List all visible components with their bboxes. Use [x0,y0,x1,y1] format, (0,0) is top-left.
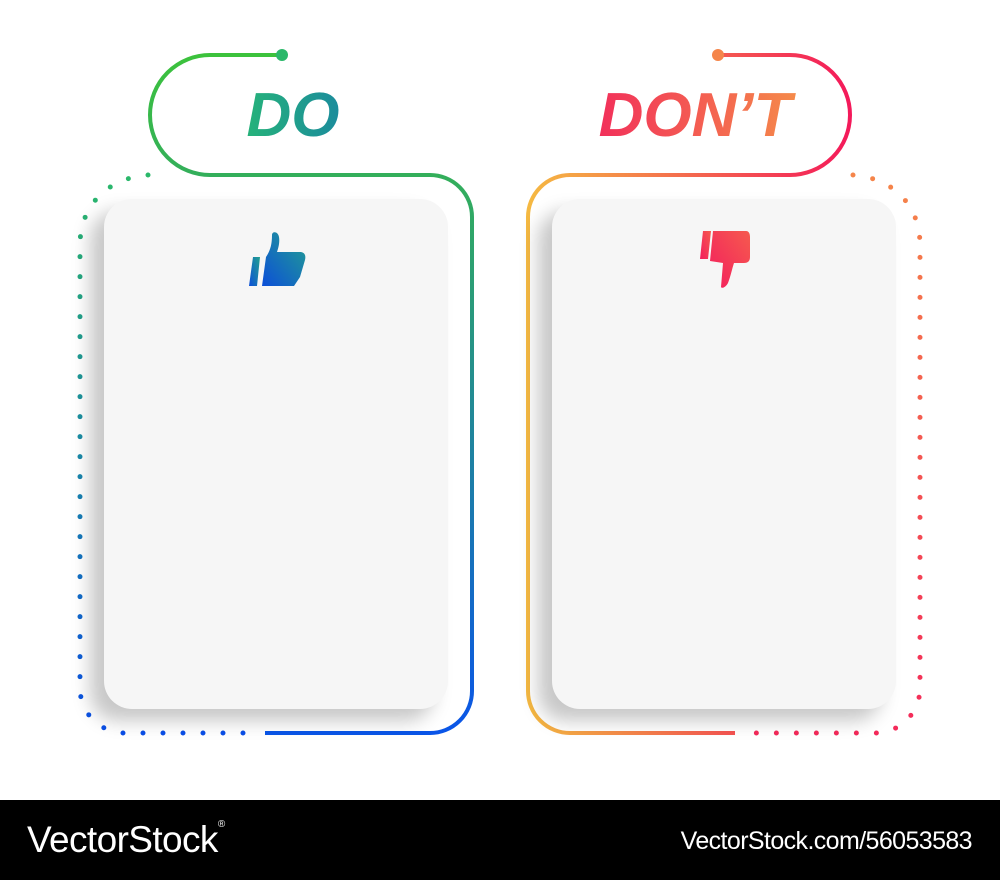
footer id: VectorStock.com/56053583 [681,827,972,855]
panel: do [104,199,448,709]
connector line: do [80,49,472,733]
connector line: dont [528,49,920,733]
icon: thumbs up [249,232,306,286]
icon: thumbs down [700,231,750,288]
heading: DO: DO [246,81,340,150]
panel: dont [552,199,896,709]
heading: DON'T: DON’T [599,81,797,150]
footer bar [0,800,1000,880]
footer brand: VectorStock® [27,819,225,860]
